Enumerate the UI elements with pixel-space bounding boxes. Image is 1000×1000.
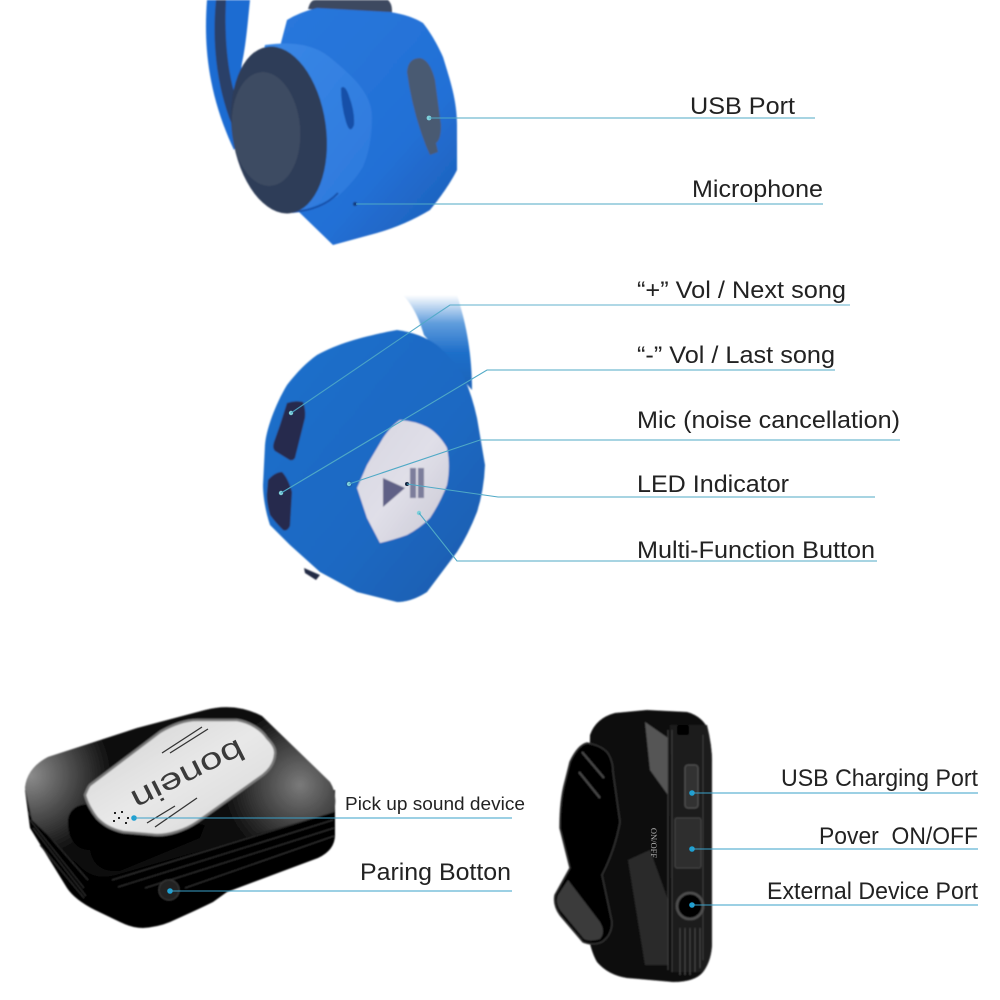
callout: USB Charging Port: USB Charging Port bbox=[781, 765, 978, 792]
lower edge button bbox=[304, 568, 320, 580]
box top surface bbox=[25, 707, 335, 876]
panel ribs bbox=[668, 730, 703, 972]
housing lower groove bbox=[292, 193, 338, 212]
black shadow under plate bbox=[68, 804, 205, 871]
callout: Mic (noise cancellation) bbox=[347, 407, 900, 486]
ON/OFF label: ON/OFF bbox=[649, 828, 659, 858]
callout: Pick up sound device: Pick up sound device bbox=[345, 794, 525, 814]
callout: LED Indicator bbox=[405, 471, 875, 498]
headset earpiece: control side bbox=[263, 295, 485, 602]
bonein logo bbox=[113, 727, 250, 827]
headset earpiece: outer view bbox=[206, 0, 457, 245]
control body bbox=[263, 330, 485, 602]
box lower body bbox=[25, 790, 335, 928]
play icon bbox=[383, 478, 405, 507]
bonein logo: bonein bbox=[126, 732, 250, 816]
clip tip gloss bbox=[557, 880, 603, 940]
USB port cover bbox=[407, 58, 441, 155]
on/off switch bbox=[675, 818, 701, 868]
vent ribs bbox=[680, 928, 700, 975]
LED hole bbox=[346, 482, 352, 486]
callout: LED Indicator: LED Indicator bbox=[637, 471, 789, 498]
top connector bbox=[308, 0, 392, 13]
callout: Pover ON/OFF bbox=[689, 823, 978, 852]
clip grip lines bbox=[579, 752, 604, 798]
transmitter clip device bbox=[555, 710, 712, 982]
side panel bbox=[670, 725, 712, 972]
belt clip bbox=[555, 743, 620, 944]
callout: USB Charging Port bbox=[689, 765, 978, 796]
headband bbox=[206, 0, 250, 150]
top gloss bbox=[645, 722, 668, 795]
callout: External Device Port bbox=[689, 878, 978, 908]
ribbed edge left bbox=[28, 812, 88, 898]
callout: "+" Vol / Next song: “+” Vol / Next song bbox=[637, 277, 846, 304]
headband dark inner stripe bbox=[215, 0, 240, 125]
callout: Multi-Function Button bbox=[417, 511, 877, 564]
volume plus button bbox=[273, 401, 305, 460]
transducer housing bbox=[240, 43, 372, 212]
top stud bbox=[677, 725, 689, 735]
callout: USB Port: USB Port bbox=[690, 93, 795, 120]
callout: Pick up sound device bbox=[131, 794, 525, 821]
headband fading bbox=[403, 295, 472, 390]
transducer inner disc bbox=[227, 69, 305, 189]
pairing button bbox=[159, 880, 179, 900]
USB charging socket bbox=[685, 765, 698, 808]
callout: Mic (noise cancellation): Mic (noise cancellation) bbox=[637, 407, 900, 434]
earpiece body bbox=[250, 8, 457, 245]
callout: "+" Vol / Next song bbox=[289, 277, 850, 415]
volume minus button bbox=[267, 472, 292, 530]
callout: Paring Botton bbox=[167, 859, 512, 894]
callout: USB Port bbox=[427, 93, 815, 120]
transmitter box bbox=[25, 707, 335, 928]
external port jack bbox=[677, 893, 703, 919]
lower gloss bbox=[628, 850, 668, 965]
callout: "-" Vol / Last song: “-” Vol / Last song bbox=[637, 342, 835, 369]
callout: "-" Vol / Last song bbox=[279, 342, 835, 495]
callout: Pover ON/OFF: Pover ON/OFF bbox=[819, 823, 978, 850]
callout: Microphone: Microphone bbox=[692, 176, 823, 203]
ribbed edge right bbox=[112, 812, 334, 888]
transducer outer pad bbox=[221, 40, 337, 220]
pick-up dots bbox=[113, 811, 129, 824]
callout: External Device Port: External Device Port bbox=[767, 878, 978, 905]
device body bbox=[587, 710, 712, 982]
housing slot bbox=[341, 87, 354, 129]
callout: Paring Botton: Paring Botton bbox=[360, 859, 511, 886]
silver multi-function plate bbox=[357, 420, 449, 543]
metal plate bbox=[85, 720, 275, 835]
callout: Multi-Function Button: Multi-Function Button bbox=[637, 537, 875, 564]
pause icon bbox=[410, 468, 424, 498]
left corner gloss bbox=[25, 707, 335, 876]
right corner gloss bbox=[25, 707, 335, 876]
microphone hole bbox=[353, 202, 357, 206]
